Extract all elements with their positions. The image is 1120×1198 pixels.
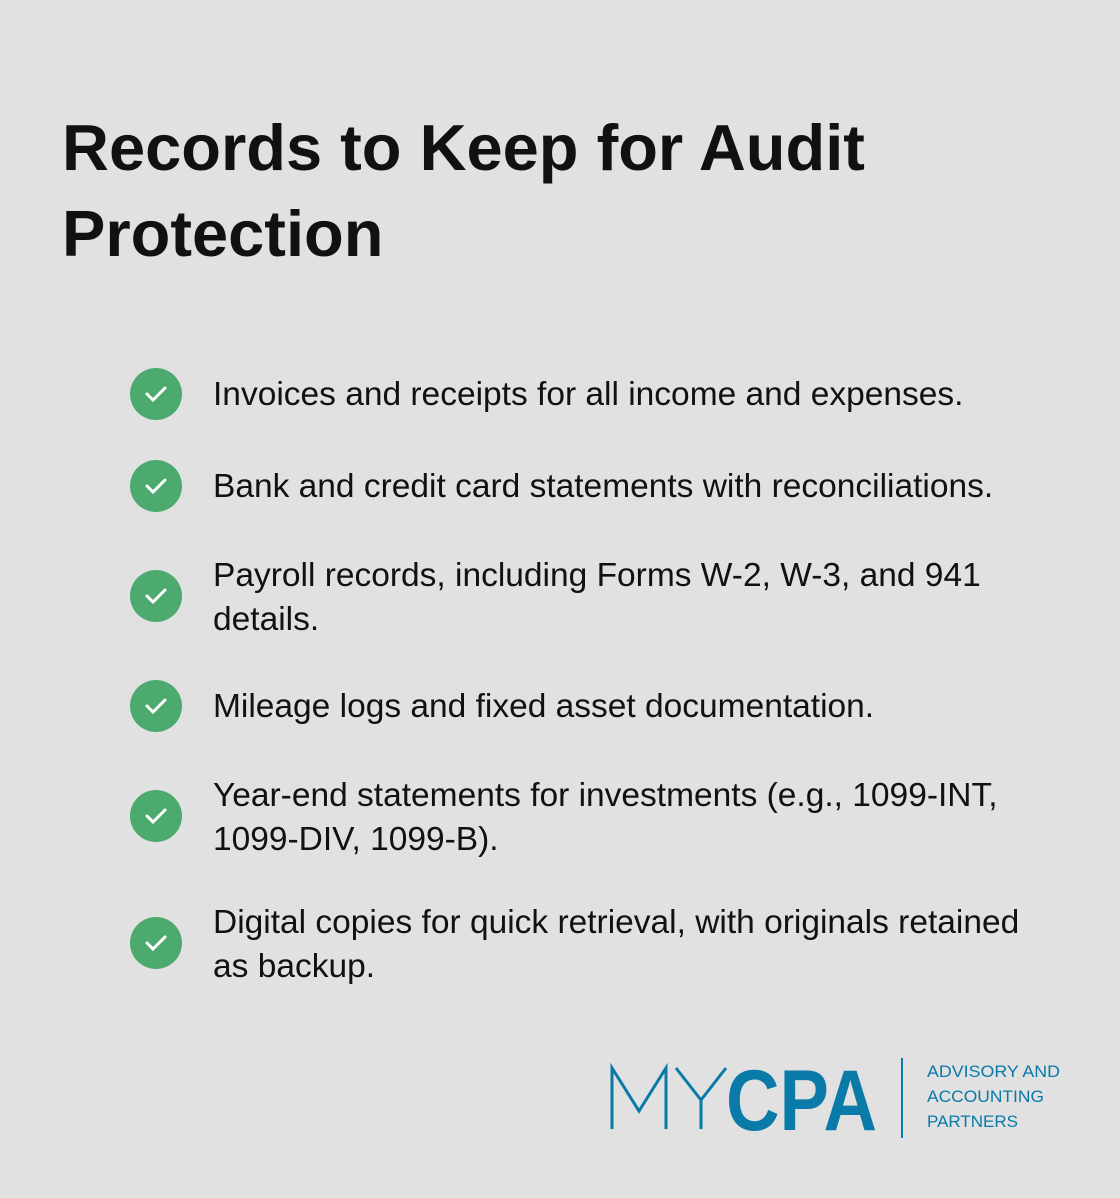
title: Protection xyxy=(62,197,383,270)
item 6: as backup. xyxy=(213,948,375,985)
logo: PARTNERS xyxy=(927,1112,1018,1131)
item 2: Bank and credit card statements with reconciliations. xyxy=(213,468,993,505)
logo: CPA xyxy=(726,1053,877,1149)
logo: ACCOUNTING xyxy=(927,1087,1044,1106)
item 6 xyxy=(130,904,1019,985)
item 4: Mileage logs and fixed asset documentation. xyxy=(213,688,874,725)
logo xyxy=(610,1053,1060,1149)
item 4 xyxy=(130,680,874,732)
title: Records to Keep for Audit xyxy=(62,111,865,184)
item 3: details. xyxy=(213,601,319,638)
item 1 xyxy=(130,368,963,420)
item 6: Digital copies for quick retrieval, with originals retained xyxy=(213,904,1019,941)
item 2 xyxy=(130,460,993,512)
item 5: Year-end statements for investments (e.g., 1099-INT, xyxy=(213,777,998,814)
item 3 xyxy=(130,557,981,638)
item 5 xyxy=(130,777,998,858)
logo: ADVISORY AND xyxy=(927,1062,1060,1081)
item 5: 1099-DIV, 1099-B). xyxy=(213,821,499,858)
title xyxy=(62,111,865,270)
item 1: Invoices and receipts for all income and expenses. xyxy=(213,376,963,413)
item 3: Payroll records, including Forms W-2, W-3, and 941 xyxy=(213,557,981,594)
